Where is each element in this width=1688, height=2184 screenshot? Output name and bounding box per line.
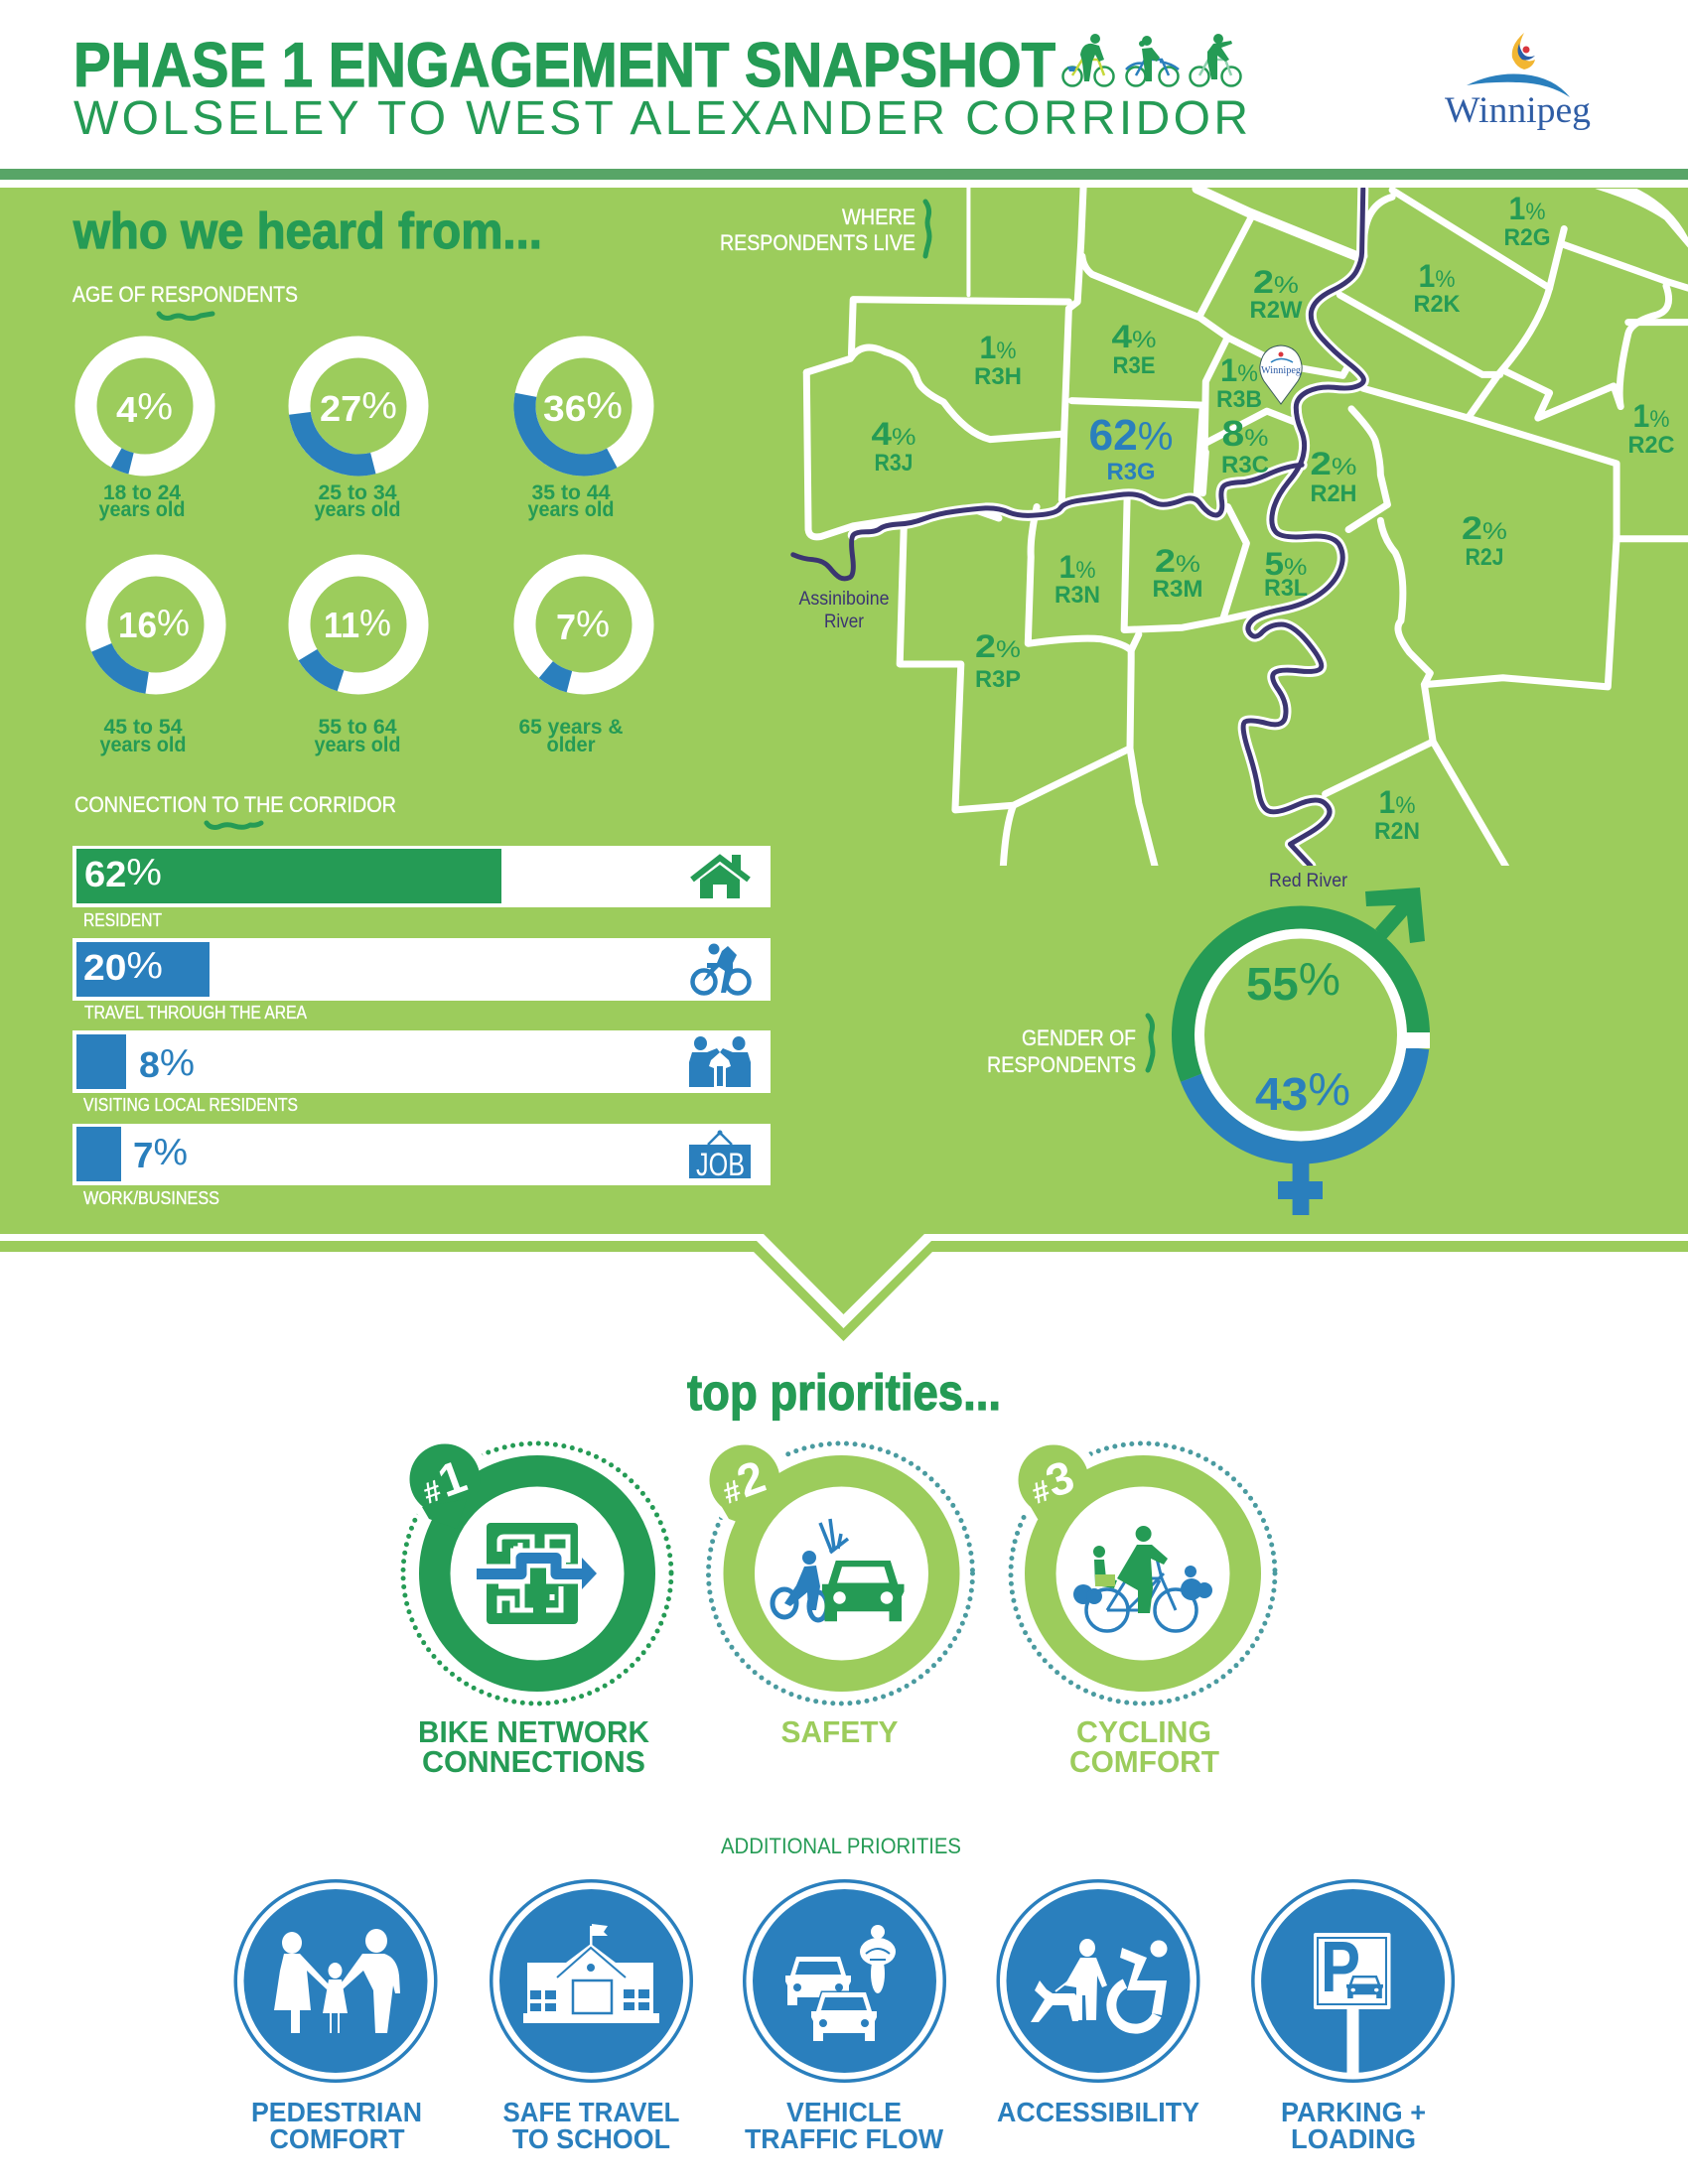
map labels: 4% — [1112, 319, 1156, 354]
bar: resident: 62 — [84, 854, 124, 894]
map labels: R3M — [1152, 576, 1203, 603]
priority 2: safety: 2 — [730, 1450, 772, 1507]
map labels: 5% — [1265, 546, 1307, 582]
header — [73, 31, 1591, 145]
label: where respondents live: RESPONDENTS LIVE — [720, 230, 915, 255]
heading: connection to the corridor — [74, 792, 396, 828]
donut charts: age — [73, 327, 663, 756]
map labels: R3B — [1216, 386, 1262, 413]
priority: pedestrian comfort: PEDESTRIAN — [251, 2097, 422, 2127]
bar: visiting local residents: VISITING LOCAL RESIDENTS — [83, 1095, 298, 1115]
heading: additional priorities: ADDITIONAL PRIORITIES — [721, 1834, 961, 1858]
map labels: 1% — [1378, 784, 1416, 820]
donut: 25 to 34 — [287, 335, 430, 521]
donut: 18 to 24 — [73, 335, 216, 521]
priority: safe travel to school: SAFE TRAVEL — [502, 2097, 679, 2127]
map labels: 1% — [1632, 398, 1670, 434]
map labels: 2% — [975, 628, 1021, 664]
heading: who we heard from: who we heard from... — [72, 203, 542, 259]
donut: 55 to 64: 55 to 64 — [318, 716, 397, 739]
map labels: 1% — [979, 330, 1017, 365]
rivers — [853, 465, 1302, 535]
icon: three cyclists — [1062, 34, 1241, 85]
icon: maze with arrow — [477, 1523, 597, 1624]
priority 1: bike network connections: 1 — [431, 1449, 473, 1507]
priority 2: safety: SAFETY — [780, 1714, 899, 1749]
subtitle: WOLSELEY TO WEST ALEXANDER CORRIDOR — [73, 92, 1248, 145]
map labels: R3H — [974, 363, 1022, 390]
priority: parking and loading: PARKING + — [1281, 2097, 1426, 2127]
donut: 18 to 24: 4 — [116, 389, 136, 430]
priority 1: bike network connections: CONNECTIONS — [422, 1744, 645, 1779]
chart: gender ring: % — [1308, 1063, 1350, 1115]
map: postal districts — [793, 188, 1688, 872]
heading: connection to the corridor: CONNECTION TO THE CORRIDOR — [74, 792, 396, 817]
map labels: R2N — [1374, 818, 1420, 845]
map labels: R3C — [1221, 452, 1269, 478]
donut: 45 to 54: 16 — [118, 605, 158, 645]
bar: travel through — [72, 938, 771, 1023]
map labels: 8% — [1221, 413, 1269, 454]
map labels: 1% — [1418, 258, 1456, 294]
icon: job sign: JOB — [696, 1147, 745, 1182]
map labels: R2C — [1628, 432, 1674, 459]
priority: accessibility: ACCESSIBILITY — [997, 2097, 1199, 2127]
donut: 25 to 34: 27 — [320, 388, 359, 429]
label: Assiniboine River: River — [824, 612, 865, 632]
map labels: R2J — [1466, 544, 1503, 571]
priority: pedestrian comfort: COMFORT — [270, 2123, 405, 2154]
donut: 45 to 54: % — [157, 603, 190, 644]
map labels: R2W — [1249, 297, 1303, 324]
icon: house — [692, 855, 749, 898]
priority: safe travel to school: TO SCHOOL — [512, 2123, 670, 2154]
icon: cars and motorcycle — [785, 1925, 896, 2041]
donut: 25 to 34: years old — [314, 498, 401, 521]
donut: 65 and older: older — [546, 734, 596, 756]
priority 1: bike network connections: # — [419, 1474, 446, 1511]
map labels: 2% — [1253, 264, 1299, 300]
map labels: R3P — [975, 666, 1021, 693]
donut: 35 to 44: years old — [528, 498, 614, 521]
label: where respondents live — [720, 202, 929, 256]
bar: visiting local residents: % — [160, 1042, 195, 1084]
map labels: R3J — [874, 450, 914, 477]
bar: work business: 7 — [133, 1135, 153, 1175]
donut: 25 to 34: % — [361, 385, 397, 427]
label: Assiniboine River — [798, 589, 890, 632]
donut: 35 to 44: % — [586, 385, 623, 427]
chart: gender ring — [1148, 883, 1454, 1215]
map labels: 2% — [1462, 510, 1507, 546]
map pin: Winnipeg — [1260, 345, 1302, 404]
bar: work business: % — [153, 1132, 188, 1173]
priority 3: cycling comfort — [1009, 1435, 1275, 1779]
priority 1: bike network connections — [400, 1434, 671, 1779]
donut: 35 to 44: 35 to 44 — [532, 481, 611, 504]
priority: parking and loading — [1251, 1879, 1455, 2154]
map labels: 1% — [1058, 549, 1096, 585]
bar: resident: RESIDENT — [83, 910, 162, 930]
map labels: 4% — [872, 416, 915, 452]
donut: 18 to 24: % — [137, 386, 173, 428]
map labels: R2H — [1311, 480, 1356, 507]
priority 2: safety: # — [719, 1474, 746, 1511]
priority: vehicle traffic flow: TRAFFIC FLOW — [745, 2123, 944, 2154]
bar: work business — [72, 1124, 771, 1208]
donut: 18 to 24: years old — [99, 498, 185, 521]
heading: top priorities: top priorities... — [687, 1364, 1001, 1421]
priority 1: bike network connections: BIKE NETWORK — [418, 1714, 650, 1749]
label: Red River: Red River — [1269, 871, 1348, 891]
map labels: 2% — [1311, 446, 1356, 481]
label: gender of respondents — [987, 1016, 1153, 1077]
bar: resident — [72, 846, 771, 930]
priority: parking and loading: LOADING — [1291, 2123, 1416, 2154]
priority: safe travel to school — [490, 1879, 693, 2154]
bar: work business: WORK/BUSINESS — [83, 1188, 219, 1208]
donut: 45 to 54: 45 to 54 — [103, 716, 183, 739]
bar: visiting local residents — [72, 1030, 771, 1115]
donut: 55 to 64 — [284, 550, 433, 756]
donut: 65 and older: 65 years & — [518, 716, 624, 739]
donut: 55 to 64: 11 — [324, 605, 361, 645]
map labels: R3L — [1264, 575, 1308, 602]
priority: accessibility — [997, 1879, 1199, 2127]
map labels: 1% — [1509, 191, 1545, 226]
icon: parking sign — [1314, 1928, 1390, 2075]
icon: job sign — [689, 1130, 751, 1182]
map labels: R3E — [1112, 352, 1156, 379]
priority 2: safety — [700, 1435, 973, 1749]
icon: family — [274, 1929, 400, 2033]
icon: parking sign: P — [1321, 1928, 1360, 2007]
icon: two people meeting — [689, 1036, 751, 1087]
icon: parent and child on bike — [1073, 1526, 1212, 1631]
map labels — [872, 191, 1674, 845]
panel: who we heard from — [0, 188, 1688, 1341]
logo: Winnipeg — [1445, 33, 1591, 131]
donut: 35 to 44: 36 — [543, 388, 583, 429]
map labels: R3G — [1106, 459, 1156, 485]
donut: 55 to 64: years old — [314, 734, 401, 756]
heading: age of respondents — [72, 282, 298, 319]
icon: school — [523, 1924, 659, 2023]
priority 3: cycling comfort: COMFORT — [1069, 1744, 1219, 1779]
donut: 25 to 34: 25 to 34 — [318, 481, 397, 504]
donut: 65 and older — [511, 552, 656, 756]
chart: gender ring: 55 — [1246, 958, 1297, 1010]
map labels: 2% — [1155, 543, 1200, 579]
label: Assiniboine River: Assiniboine — [798, 589, 890, 610]
map boundaries — [793, 188, 1688, 872]
priority 3: cycling comfort: CYCLING — [1076, 1714, 1211, 1749]
panel: additional priorities — [234, 1879, 1455, 2154]
label: where respondents live: WHERE — [842, 205, 915, 229]
map labels: R3N — [1055, 582, 1100, 609]
bar: travel through: TRAVEL THROUGH THE AREA — [84, 1003, 307, 1023]
label: gender of respondents: RESPONDENTS — [987, 1052, 1136, 1077]
icon: cyclist — [693, 943, 749, 993]
chart: gender ring: 43 — [1255, 1068, 1306, 1120]
map pin: Winnipeg: Winnipeg — [1261, 364, 1301, 376]
donut: 65 and older: % — [576, 604, 610, 645]
rule — [0, 169, 1688, 180]
priority: vehicle traffic flow — [743, 1879, 946, 2154]
donut: 18 to 24: 18 to 24 — [103, 481, 181, 504]
title: PHASE 1 ENGAGEMENT SNAPSHOT — [73, 31, 1055, 100]
chart: gender ring: % — [1299, 953, 1340, 1005]
priority 3: cycling comfort: 3 — [1039, 1450, 1080, 1507]
map labels: 1% — [1220, 352, 1258, 388]
map labels: 62% — [1088, 411, 1174, 460]
heading: age of respondents: AGE OF RESPONDENTS — [72, 282, 298, 307]
donut: 55 to 64: % — [359, 603, 391, 644]
map labels: R2G — [1503, 224, 1551, 251]
bar: resident: % — [126, 852, 162, 893]
bar chart: connection — [72, 846, 771, 1208]
label: gender of respondents: GENDER OF — [1022, 1025, 1136, 1050]
priority: vehicle traffic flow: VEHICLE — [786, 2097, 902, 2127]
donut: 35 to 44 — [504, 327, 663, 521]
bar: travel through: 20 — [83, 947, 123, 988]
donut: 45 to 54: years old — [99, 734, 187, 756]
icon: cyclist and car — [773, 1519, 904, 1621]
map labels: R2K — [1414, 291, 1461, 318]
donut: 45 to 54 — [88, 557, 223, 756]
bar: travel through: % — [126, 945, 163, 987]
panel: top priorities — [400, 1434, 1275, 1779]
icon: guide dog and wheelchair — [1031, 1939, 1168, 2029]
priority: pedestrian comfort — [234, 1879, 437, 2154]
priority 3: cycling comfort: # — [1028, 1474, 1055, 1511]
bar: visiting local residents: 8 — [139, 1044, 159, 1085]
logo: Winnipeg: Winnipeg — [1445, 90, 1591, 131]
donut: 65 and older: 7 — [556, 607, 576, 647]
